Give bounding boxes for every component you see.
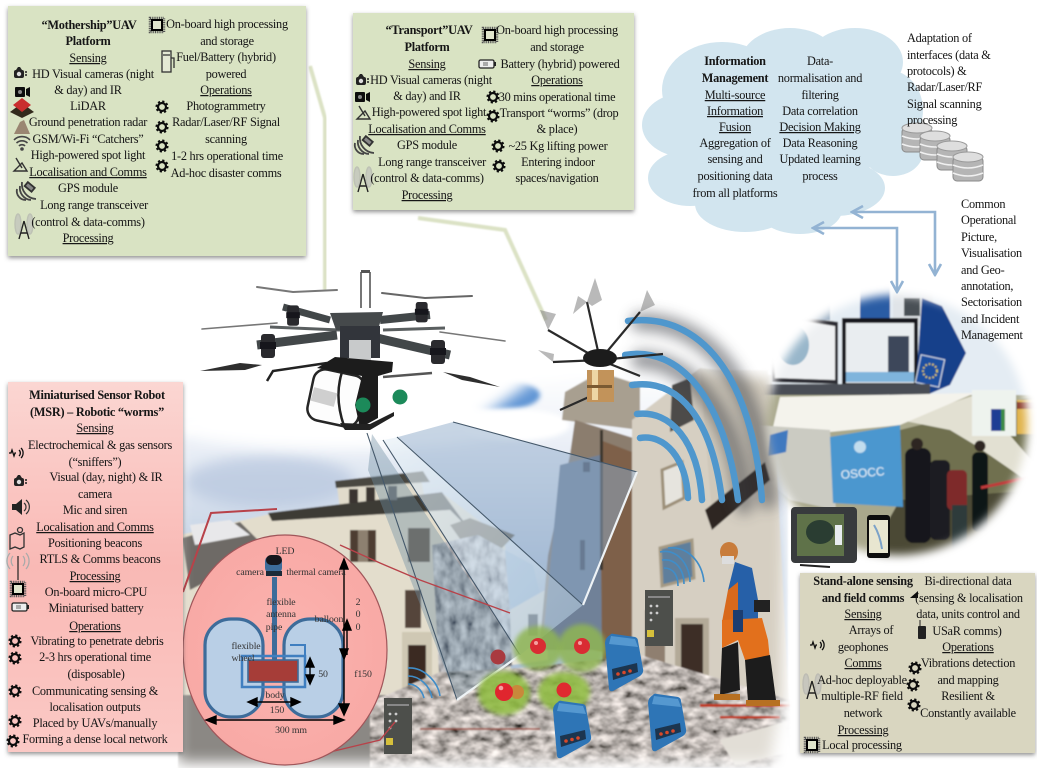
wireless signal over window — [660, 548, 704, 586]
arrow: cloud to operations tent — [852, 206, 941, 275]
text: mothership left column: (control & data-comms) — [31, 215, 145, 229]
left house with collapsed roof — [183, 470, 515, 696]
text: transport left column — [368, 23, 493, 202]
text: MSR list: 2-3 hrs operational time — [39, 650, 152, 664]
text: adaptation of interfaces: processing — [907, 113, 957, 127]
panel: Stand-alone sensing and field comms — [800, 573, 1035, 753]
text: transport left column: (control & data-comms) — [370, 171, 484, 185]
propellers — [202, 287, 505, 341]
text: mothership left column: Localisation and Comms — [29, 165, 147, 179]
sky — [183, 379, 788, 670]
text: transport right column: Entering indoor — [521, 155, 595, 169]
text: transport left column: HD Visual cameras (night — [370, 73, 493, 87]
text: stand-alone right column: Bi-directional data — [924, 574, 1012, 588]
text: transport right column: ~25 Kg lifting power — [508, 139, 608, 153]
text: transport right column: & place) — [537, 122, 577, 136]
text: MSR list: Communicating sensing & — [32, 684, 159, 698]
cloud text: left column: from all platforms — [693, 186, 778, 200]
text: mothership left column — [29, 18, 155, 245]
connector: transport panel to drone — [418, 218, 546, 320]
text: mothership right column: 1-2 hrs operational time — [171, 149, 284, 163]
diagram labels: 300 mm — [275, 725, 307, 736]
cloud text: right column: Data Reasoning — [783, 136, 857, 150]
diagram labels: LED — [276, 546, 294, 557]
text: stand-alone left column: multiple-RF field — [821, 689, 903, 703]
diagram labels: pipe — [266, 622, 283, 633]
back building and gap of sky — [505, 550, 548, 665]
rubble ground — [178, 650, 790, 768]
transport UAV drone — [538, 278, 663, 410]
text: stand-alone left column: Sensing — [844, 607, 882, 621]
cloud text: right column — [778, 54, 862, 183]
diagram labels: flexible — [231, 641, 261, 652]
motors — [260, 334, 276, 358]
icons: MSR — [7, 448, 29, 747]
diagram labels: 0 — [356, 609, 361, 620]
icons: stand-alone — [803, 591, 926, 752]
text: adaptation of interfaces: Adaptation of — [907, 31, 973, 45]
text: MSR list: localisation outputs — [50, 700, 141, 714]
cloud text: right column: Data- — [807, 54, 833, 68]
text: MSR list: On-board micro-CPU — [45, 585, 148, 599]
text: mothership left column: & day) and IR — [54, 83, 123, 97]
cloud text: right column: Data correlation — [782, 104, 858, 118]
text: stand-alone left column: Comms — [844, 656, 882, 670]
text: stand-alone right column — [915, 574, 1023, 720]
payload cylinder — [305, 367, 367, 429]
text: MSR list: RTLS & Comms beacons — [40, 552, 161, 566]
text: common operational picture: Sectorisation — [961, 295, 1022, 309]
panel: Miniaturised Sensor Robot — [7, 382, 183, 752]
text: mothership left column: GPS module — [58, 181, 119, 195]
text: mothership right column: Radar/Laser/RF Signal — [172, 115, 281, 129]
text: MSR list: Operations — [69, 619, 121, 633]
text: MSR list: (disposable) — [67, 667, 125, 681]
cloud: information management — [642, 28, 923, 234]
diagram labels: 150 — [270, 705, 284, 716]
cloud text: left column: sensing and — [708, 152, 763, 166]
text: adaptation of interfaces: Signal scanning — [907, 97, 982, 111]
text: adaptation of interfaces — [907, 31, 991, 127]
text: mothership right column: Ad-hoc disaster comms — [171, 166, 282, 180]
text: transport left column: Long range transceiver — [378, 155, 486, 169]
text: mothership right column: Operations — [200, 83, 252, 97]
text: common operational picture: Operational — [961, 213, 1017, 227]
cloud text: right column: normalisation and — [778, 71, 862, 85]
text: mothership left column: Processing — [63, 231, 113, 245]
blue robotic sensors — [553, 634, 686, 758]
cloud text: left column: Management — [702, 71, 769, 85]
text: MSR list: Localisation and Comms — [36, 520, 154, 534]
wireless signal near ground device — [408, 668, 440, 698]
text: MSR list: Vibrating to penetrate debris — [30, 634, 164, 648]
diagram: robot body with balloons — [205, 555, 351, 724]
text: transport left column: “Transport”UAV — [386, 23, 473, 37]
arms — [257, 307, 450, 381]
text: stand-alone right column: USaR comms) — [932, 624, 1002, 638]
text: transport left column: Processing — [402, 188, 452, 202]
diagram labels: balloon — [315, 614, 344, 625]
text: transport right column: and storage — [530, 40, 585, 54]
cloud text: right column: Updated learning — [779, 152, 861, 166]
text: common operational picture: annotation, — [961, 279, 1013, 293]
text: mothership left column: LiDAR — [70, 99, 107, 113]
cloud text: left column: positioning data — [698, 169, 773, 183]
text: stand-alone left column: Processing — [838, 723, 888, 737]
right building — [632, 368, 790, 720]
text: common operational picture — [961, 197, 1024, 342]
text: transport left column: High-powered spot light — [372, 105, 487, 119]
text: mothership right column: Photogrammetry — [186, 99, 267, 113]
text: stand-alone left column: Local processing — [822, 738, 902, 752]
text: MSR list: Forming a dense local network — [22, 732, 169, 746]
arrow: operations centre to cloud — [813, 222, 903, 292]
diagram labels: wheel — [232, 653, 255, 664]
text: mothership right column: On-board high processing — [166, 17, 288, 31]
text: mothership left column: GSM/Wi-Fi “Catchers” — [33, 132, 143, 146]
text: common operational picture: Common — [961, 197, 1005, 211]
text: common operational picture: Management — [961, 328, 1024, 342]
scene: earthquake rubble street background — [170, 368, 790, 768]
smartphone with map — [867, 515, 890, 558]
text: stand-alone left column: Stand-alone sensing — [813, 574, 914, 588]
text: MSR list: Placed by UAVs/manually — [33, 716, 158, 730]
text: MSR list: Processing — [70, 569, 120, 583]
text: MSR list: Mic and siren — [63, 503, 127, 517]
green sensors — [356, 398, 370, 412]
text: mothership left column: Ground penetration radar — [29, 115, 147, 129]
diagram labels: antenna — [266, 609, 297, 620]
panel: MSR exploded diagram circle — [183, 535, 387, 765]
cloud text: right column: Decision Making — [779, 120, 861, 134]
diagram labels: 50 — [318, 669, 328, 680]
icons: transport — [354, 28, 505, 192]
text: MSR list: Visual (day, night) & IR — [49, 470, 164, 484]
mothership UAV drone — [200, 270, 505, 430]
diagram labels: camera — [236, 567, 265, 578]
text: stand-alone left column: Arrays of — [849, 623, 894, 637]
text: stand-alone left column — [813, 574, 914, 752]
text: MSR list: Sensing — [76, 421, 114, 435]
text: stand-alone left column: and field comms — [822, 591, 905, 605]
text: mothership left column: Platform — [65, 34, 112, 48]
icon: database stacks — [902, 123, 983, 181]
text: transport left column: Localisation and Comms — [368, 122, 486, 136]
text: stand-alone right column: Constantly available — [920, 706, 1017, 720]
text: MSR list: (MSR) – Robotic “worms” — [30, 405, 164, 419]
text: common operational picture: Visualisation — [961, 246, 1022, 260]
text: stand-alone right column: Resilient & — [941, 689, 995, 703]
text: mothership right column: and storage — [200, 34, 255, 48]
text: stand-alone left column: geophones — [838, 640, 889, 654]
panel: Mothership UAV platform — [8, 6, 306, 256]
cloud text: left column: Information — [704, 54, 766, 68]
rescuer in orange suit — [714, 542, 780, 706]
text: transport right column: 30 mins operational time — [499, 90, 616, 104]
text: transport left column: Platform — [404, 40, 451, 54]
text: adaptation of interfaces: interfaces (data & — [907, 48, 991, 62]
text: mothership left column: HD Visual cameras (night — [32, 67, 155, 81]
text: mothership right column: powered — [206, 67, 246, 81]
text: transport right column: Operations — [531, 73, 583, 87]
cloud text: right column: filtering — [801, 88, 839, 102]
text: MSR list: Positioning beacons — [48, 536, 142, 550]
text: stand-alone right column: data, units control and — [916, 607, 1020, 621]
tower — [540, 372, 648, 660]
diagram labels: 2 — [356, 597, 361, 608]
text: transport right column — [496, 23, 620, 185]
text: transport right column: spaces/navigation — [515, 171, 599, 185]
text: MSR list: (“sniffers”) — [69, 455, 122, 469]
cloud text: left column — [693, 54, 778, 200]
text: transport right column: Transport “worms” (drop — [500, 106, 618, 120]
text: mothership right column: Fuel/Battery (hybrid) — [176, 50, 276, 64]
red callout lines from MSR diagram — [183, 509, 510, 752]
text: mothership left column: Sensing — [69, 51, 107, 65]
photo oval: operations centre and OSOCC tent — [763, 288, 1034, 562]
text: stand-alone left column: Ad-hoc deployable — [817, 673, 908, 687]
diagram labels — [231, 546, 372, 736]
text: transport left column: Sensing — [408, 57, 446, 71]
tent with OSOCC banner — [763, 390, 1034, 562]
ground sensor devices — [384, 590, 673, 754]
text: common operational picture: and Geo- — [961, 263, 1005, 277]
tent with OSOCC banner: OSOCC — [840, 464, 886, 482]
text: adaptation of interfaces: Radar/Laser/RF — [907, 80, 982, 94]
panel: Transport UAV platform — [353, 13, 634, 210]
text: MSR list — [22, 388, 172, 746]
text: stand-alone right column: Vibrations detection — [921, 656, 1015, 670]
text: MSR list: Electrochemical & gas sensors — [28, 438, 172, 452]
diagram labels: flexible — [266, 597, 296, 608]
operations room with monitors — [764, 288, 1025, 396]
text: MSR list: camera — [78, 487, 113, 501]
cloud text: left column: Fusion — [719, 120, 751, 134]
diagram labels: 0 — [356, 622, 361, 633]
dimension arrows — [206, 559, 351, 724]
diagram labels: body — [265, 690, 285, 701]
text: stand-alone right column: Operations — [942, 640, 994, 654]
text: mothership left column: High-powered spot light — [31, 148, 146, 162]
connector: mothership panel to drone — [310, 66, 325, 290]
cloud text: left column: Information — [707, 104, 763, 118]
text: transport left column: GPS module — [397, 138, 458, 152]
cloud text: right column: process — [802, 169, 838, 183]
mast and hub — [360, 272, 362, 308]
text: common operational picture: Picture, — [961, 230, 997, 244]
icons: mothership — [10, 18, 174, 239]
cloud text: left column: Multi-source — [705, 88, 766, 102]
text: transport right column: On-board high processing — [496, 23, 618, 37]
text: MSR list: Miniaturised Sensor Robot — [29, 388, 166, 402]
survivors: red balls with green heat glow — [478, 624, 606, 715]
diagram labels: thermal camera — [286, 567, 346, 578]
text: MSR list: Miniaturised battery — [48, 601, 145, 615]
text: mothership right column — [166, 17, 288, 180]
text: mothership right column: scanning — [205, 132, 247, 146]
diagram labels: f150 — [354, 669, 372, 680]
text: transport right column: Battery (hybrid) powered — [501, 57, 620, 71]
text: stand-alone left column: network — [844, 706, 883, 720]
text: stand-alone right column: (sensing & localisation — [915, 591, 1023, 605]
text: common operational picture: and Incident — [961, 312, 1020, 326]
text: mothership left column: “Mothership”UAV — [41, 18, 137, 32]
text: transport left column: & day) and IR — [393, 89, 462, 103]
wifi signal arcs from transport UAV — [625, 320, 768, 505]
cloud text: left column: Aggregation of — [699, 136, 772, 150]
text: mothership left column: Long range transceiver — [40, 198, 148, 212]
rugged tablet with map — [791, 507, 857, 567]
text: stand-alone right column: and mapping — [937, 673, 999, 687]
text: adaptation of interfaces: protocols) & — [907, 64, 967, 78]
glass sensing beam from mothership UAV — [367, 422, 637, 700]
